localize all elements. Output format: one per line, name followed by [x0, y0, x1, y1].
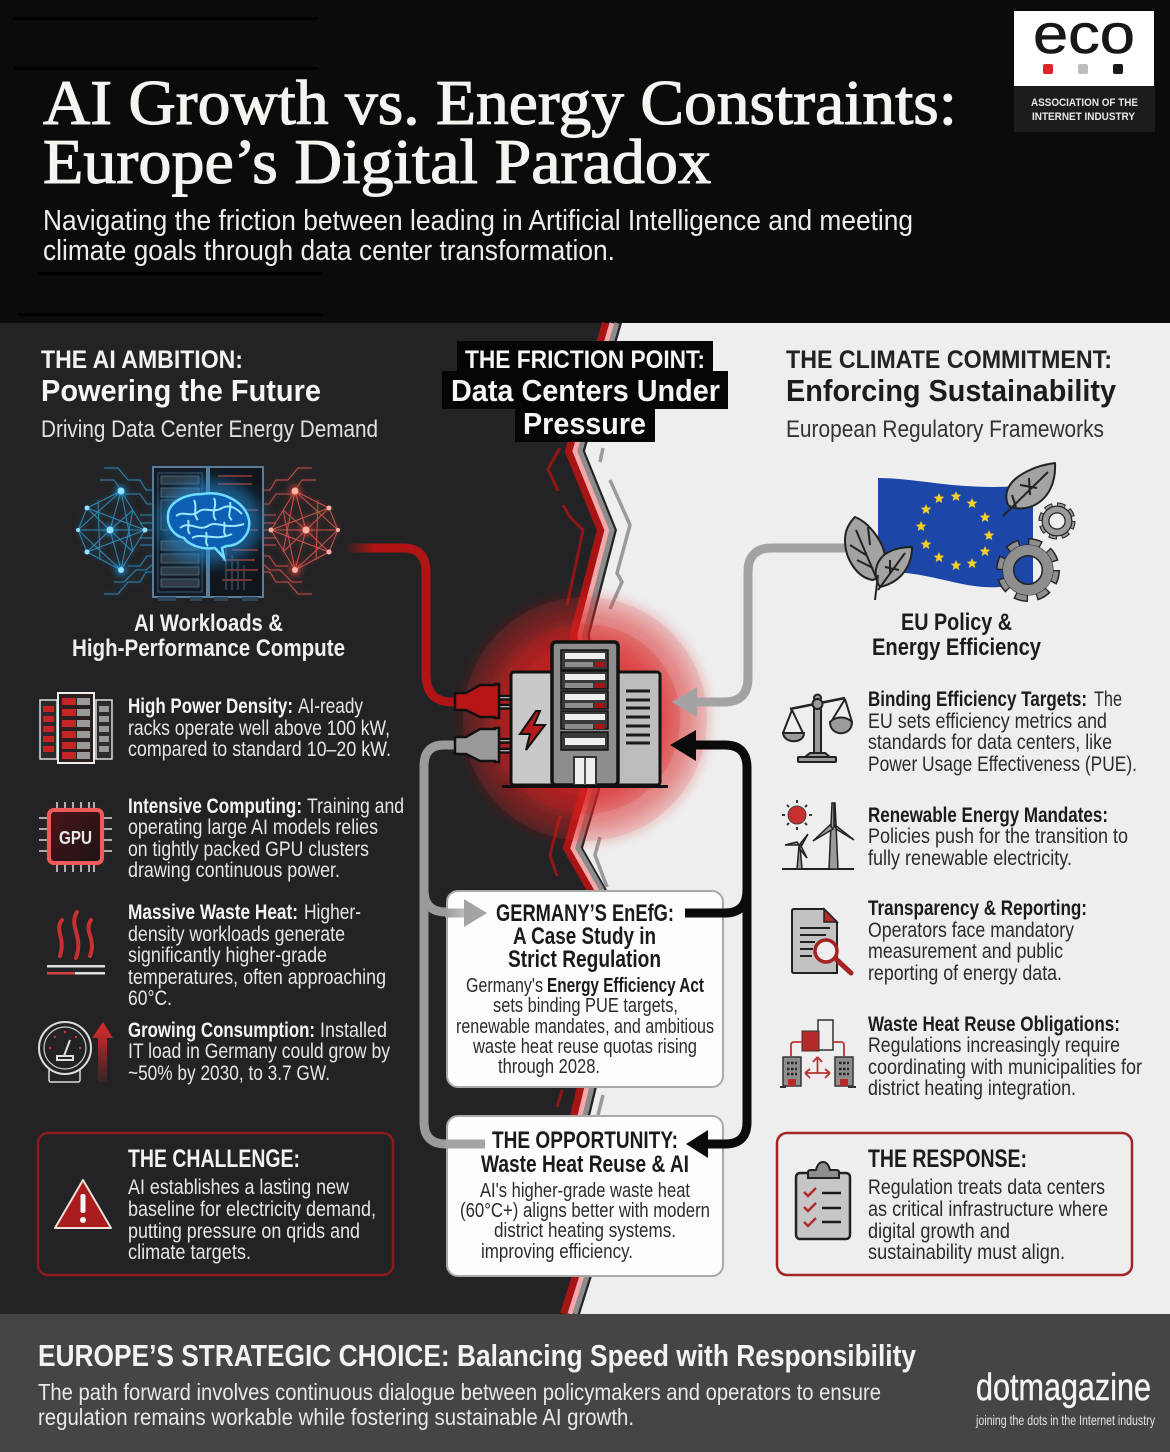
logo: dotmagazine: [975, 1367, 1155, 1428]
left section heading: THE AI AMBITION:: [41, 346, 243, 374]
text: massive waste heat: Massive Waste Heat:: [128, 901, 298, 924]
panel: Germany EnEfG case study: [445, 891, 727, 1087]
title: [43, 68, 957, 197]
text: renewable energy mandates: Policies push for the transition to: [868, 825, 1128, 848]
text: growing consumption: IT load in Germany could grow by: [128, 1040, 390, 1063]
text: transparency and reporting: [868, 897, 1087, 985]
panel: the opportunity: [445, 1116, 727, 1276]
callout: the response: [777, 1133, 1132, 1275]
text: the challenge: THE CHALLENGE:: [128, 1145, 300, 1173]
text: opportunity: district heating systems.: [494, 1220, 676, 1242]
icon: server racks: [40, 693, 112, 763]
text: opportunity: (60°C+) aligns better with modern: [460, 1200, 710, 1222]
icon: warning triangle: [55, 1180, 111, 1228]
center section heading: [442, 341, 728, 442]
item: transparency and reporting: [792, 897, 1087, 985]
text: intensive computing: Training and: [307, 795, 404, 818]
text: renewable energy mandates: [868, 804, 1128, 870]
text: case study: waste heat reuse quotas rising: [472, 1036, 697, 1058]
text: the response: digital growth and: [868, 1220, 1010, 1243]
text: case study: Energy Efficiency Act: [547, 975, 704, 997]
footer text: [38, 1379, 881, 1430]
text: massive waste heat: temperatures, often approaching: [128, 966, 386, 989]
panel backgrounds with fracture: [0, 323, 1170, 1314]
icon: heat waves: [47, 912, 105, 974]
arrow start: black stub: [685, 908, 727, 918]
text: the response: Regulation treats data centers: [868, 1176, 1105, 1199]
arrow end: gray stub: [445, 1140, 485, 1148]
text: case study: sets binding PUE targets,: [493, 995, 678, 1017]
heading: opportunity: Waste Heat Reuse & AI: [481, 1151, 689, 1178]
text: the challenge: climate targets.: [128, 1241, 251, 1264]
arrow: red connector from AI workloads to data center: [345, 548, 462, 702]
logo: eco: ASSOCIATION OF THE: [1031, 97, 1138, 109]
text: massive waste heat: Higher-: [304, 901, 361, 924]
text: high power density: compared to standard 10–20 kW.: [128, 738, 391, 761]
text: massive waste heat: density workloads generate: [128, 923, 345, 946]
arrowhead: black into data center: [670, 730, 696, 761]
item: binding efficiency targets: [783, 688, 1137, 776]
callout: the challenge: [38, 1133, 393, 1275]
text: transparency and reporting: Operators face mandatory: [868, 919, 1074, 942]
text: transparency and reporting: reporting of energy data.: [868, 962, 1062, 985]
text: the challenge: putting pressure on qrids and: [128, 1220, 360, 1243]
text: waste heat reuse obligations: Waste Heat Reuse Obligations:: [868, 1013, 1120, 1036]
text: opportunity: AI's higher-grade waste heat: [480, 1180, 690, 1202]
caption: EU policy: Energy Efficiency: [872, 634, 1042, 661]
footer text: regulation remains workable while fostering sustainable AI growth.: [38, 1404, 634, 1430]
text: intensive computing: operating large AI models relies: [128, 816, 378, 839]
arrow: black connector from case study to data center and opportunity: [685, 745, 747, 1144]
logo: eco: INTERNET INDUSTRY: [1032, 111, 1136, 123]
text: intensive computing: on tightly packed GPU clusters: [128, 838, 369, 861]
arrowhead: gray into data center: [672, 687, 697, 717]
text: intensive computing: Intensive Computing:: [128, 795, 302, 818]
text: intensive computing: [128, 795, 404, 882]
right section heading: Enforcing Sustainability: [786, 373, 1117, 408]
text: massive waste heat: significantly higher-grade: [128, 944, 327, 967]
text: waste heat reuse obligations: Regulations increasingly require: [868, 1034, 1120, 1057]
text: case study: through 2028.: [498, 1056, 600, 1078]
text: renewable energy mandates: fully renewable electricity.: [868, 847, 1072, 870]
item: massive waste heat: [47, 901, 386, 1010]
icon: data center building with plugs: [455, 642, 668, 788]
item: growing consumption: [39, 1019, 390, 1085]
text: growing consumption: [128, 1019, 390, 1085]
heading: case study: A Case Study in: [513, 923, 656, 950]
title: AI Growth vs. Energy Constraints:: [43, 68, 957, 138]
text: the response: [868, 1145, 1108, 1264]
text: waste heat reuse obligations: [868, 1013, 1142, 1100]
icon: GPU chip: GPU: [59, 828, 92, 848]
arrowhead: black entering opportunity: [686, 1130, 727, 1158]
arrow: gray connector from EU policy to data center: [695, 548, 846, 702]
right section heading: [786, 346, 1117, 443]
right section heading: European Regulatory Frameworks: [786, 416, 1104, 443]
subtitle: climate goals through data center transformation.: [43, 235, 615, 267]
heading: case study: GERMANY’S EnEfG:: [496, 900, 674, 927]
icon: clipboard checklist: [796, 1162, 850, 1239]
text: waste heat reuse obligations: district heating integration.: [868, 1077, 1076, 1100]
center section heading: Pressure: [523, 406, 646, 441]
center section heading: THE FRICTION POINT:: [465, 346, 705, 374]
heading: case study: [496, 900, 674, 973]
item: waste heat reuse obligations: [780, 1013, 1142, 1100]
text: case study: Germany's: [466, 975, 543, 997]
text: high power density: High Power Density:: [128, 695, 293, 718]
text: the challenge: AI establishes a lasting new: [128, 1176, 350, 1199]
logo: eco: eco: [1033, 2, 1135, 65]
icon: large gear: [1002, 544, 1054, 596]
subtitle: Navigating the friction between leading in Artificial Intelligence and meeting: [43, 205, 913, 237]
icon: small gear: [1042, 506, 1072, 536]
item: intensive computing: [39, 795, 404, 882]
illustration: EU flag with leaves and gears: [845, 463, 1072, 600]
arrowhead: gray entering case study: [445, 899, 487, 927]
caption: AI workloads: AI Workloads &: [134, 610, 283, 637]
text: growing consumption: Installed: [320, 1019, 387, 1042]
text: high power density: [128, 695, 391, 761]
caption: EU policy: [872, 609, 1042, 661]
icon: GPU chip: [39, 802, 112, 872]
illustration: AI server with brain and neural networks: [76, 467, 340, 601]
footer heading: EUROPE’S STRATEGIC CHOICE: Balancing Speed with Responsibility: [38, 1338, 917, 1373]
logo: eco: [1014, 2, 1155, 132]
icon: balance scales: [783, 694, 852, 762]
text: high power density: AI-ready: [298, 695, 363, 718]
text: growing consumption: Growing Consumption:: [128, 1019, 315, 1042]
left section heading: Powering the Future: [41, 373, 321, 408]
text: intensive computing: drawing continuous power.: [128, 859, 340, 882]
title: Europe’s Digital Paradox: [43, 127, 711, 197]
text: transparency and reporting: Transparency & Reporting:: [868, 897, 1087, 920]
text: the response: as critical infrastructure where: [868, 1198, 1108, 1221]
icon: document with magnifier: [792, 909, 851, 973]
header band: [0, 0, 1170, 323]
icon: meter with rising arrow: [39, 1022, 113, 1082]
footer band: [0, 1314, 1170, 1452]
text: binding efficiency targets: The: [1094, 688, 1122, 711]
subtitle: [43, 205, 913, 267]
caption: EU policy: EU Policy &: [901, 609, 1012, 636]
icon: district heating buildings: [780, 1020, 856, 1087]
text: high power density: racks operate well above 100 kW,: [128, 717, 390, 740]
left section heading: [41, 346, 378, 443]
text: transparency and reporting: measurement and public: [868, 940, 1063, 963]
heading: opportunity: [481, 1127, 689, 1178]
center section heading: Data Centers Under: [451, 373, 720, 408]
text: renewable energy mandates: Renewable Energy Mandates:: [868, 804, 1108, 827]
text: the response: sustainability must align.: [868, 1241, 1065, 1264]
text: massive waste heat: [128, 901, 386, 1010]
text: growing consumption: ~50% by 2030, to 3.7 GW.: [128, 1062, 330, 1085]
text: the challenge: baseline for electricity demand,: [128, 1198, 376, 1221]
text: binding efficiency targets: Binding Efficiency Targets:: [868, 688, 1087, 711]
footer text: The path forward involves continuous dialogue between policymakers and operators to ensure: [38, 1379, 881, 1405]
text: case study: renewable mandates, and ambitious: [456, 1016, 714, 1038]
text: binding efficiency targets: [868, 688, 1137, 776]
text: binding efficiency targets: standards for data centers, like: [868, 731, 1112, 754]
text: massive waste heat: 60°C.: [128, 987, 172, 1010]
text: opportunity: [460, 1180, 710, 1263]
red glow behind data center: [453, 587, 717, 851]
item: high power density: [40, 693, 391, 763]
text: case study: [456, 975, 714, 1078]
icon: sun and wind turbines: [782, 800, 854, 869]
text: the challenge: [128, 1145, 376, 1264]
left section heading: Driving Data Center Energy Demand: [41, 416, 378, 443]
caption: AI workloads: [72, 610, 345, 662]
text: binding efficiency targets: EU sets efficiency metrics and: [868, 710, 1107, 733]
heading: case study: Strict Regulation: [508, 946, 661, 973]
item: renewable energy mandates: [782, 800, 1128, 870]
text: the response: THE RESPONSE:: [868, 1145, 1027, 1173]
caption: AI workloads: High-Performance Compute: [72, 635, 345, 662]
arrow: gray connector from plug to case study and opportunity: [424, 745, 484, 1144]
right section heading: THE CLIMATE COMMITMENT:: [786, 346, 1112, 374]
heading: opportunity: THE OPPORTUNITY:: [492, 1127, 678, 1154]
text: opportunity: improving efficiency.: [481, 1241, 633, 1263]
